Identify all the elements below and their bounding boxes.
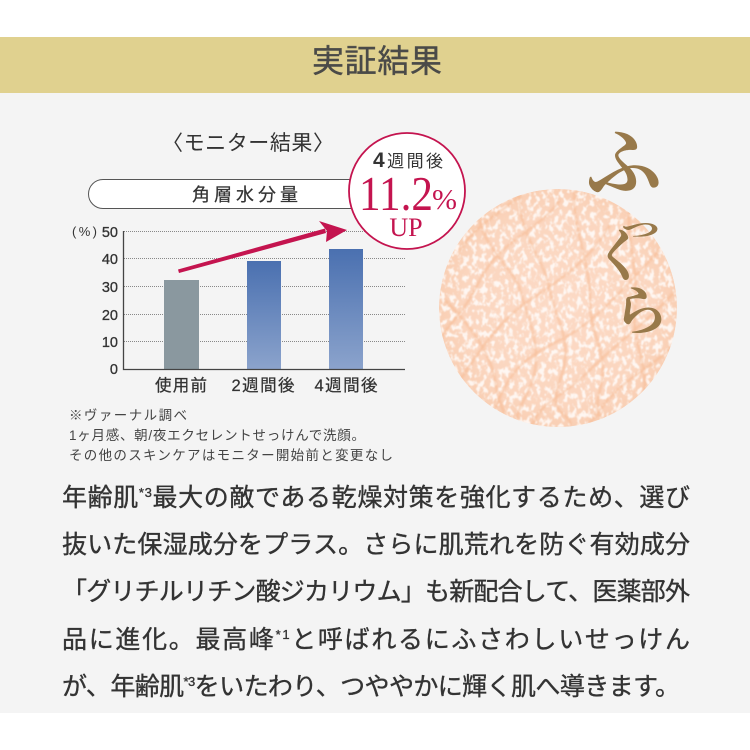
- footnote: [69, 407, 393, 463]
- x axis labels: [155, 376, 378, 395]
- calligraphy: fukkura: っ: [615, 211, 666, 244]
- body text: 年齢肌: [62, 484, 138, 512]
- body text: 「グリチルリチン酸ジカリウム」も新配合して、医薬部外: [62, 578, 690, 606]
- footnote: 1ヶ月感、朝/夜エクセレントせっけんで洗顔。: [69, 427, 365, 443]
- unit label: (%): [72, 224, 97, 239]
- bar: 4 weeks: [329, 249, 363, 369]
- arrow: upward trend: [178, 221, 347, 273]
- metric label pill: [88, 180, 368, 208]
- y axis labels: 50: [102, 225, 118, 241]
- body text: 最大の敵である乾燥対策を強化するため、選び: [152, 484, 690, 512]
- heading: 実証結果: [312, 43, 442, 79]
- y axis labels: 30: [102, 280, 118, 296]
- body text: をいたわり、つややかに輝く肌へ導きます。: [195, 673, 680, 701]
- body text: [62, 484, 690, 701]
- panel: monitor results: [69, 132, 405, 463]
- body text: と呼ばれるにふさわしいせっけん: [291, 626, 690, 654]
- metric label pill: 角層水分量: [192, 185, 298, 205]
- bar chart: [72, 224, 405, 395]
- chart title: 〈モニター結果〉: [162, 132, 334, 155]
- body text: が、年齢肌: [62, 673, 184, 701]
- footnote: ※ヴァーナル調べ: [69, 407, 187, 423]
- badge: value: 11.2: [359, 166, 433, 221]
- y axis labels: 10: [102, 335, 118, 351]
- y axis labels: [102, 225, 118, 378]
- calligraphy: fukkura: く: [596, 228, 644, 289]
- x axis labels: 使用前: [155, 376, 207, 395]
- body text: *3: [184, 674, 195, 689]
- body text: 品に進化。最高峰: [62, 626, 274, 654]
- bar: 2 weeks: [247, 261, 281, 369]
- body text: *1: [276, 627, 290, 642]
- x axis labels: 4週間後: [314, 376, 378, 395]
- body text: 抜いた保湿成分をプラス。さらに肌荒れを防ぐ有効成分: [62, 531, 690, 559]
- y axis labels: 0: [110, 362, 118, 378]
- x axis labels: 2週間後: [232, 376, 295, 395]
- calligraphy: fukkura: ふ: [586, 123, 662, 207]
- bar: before use: [164, 280, 199, 369]
- header band: [0, 37, 750, 93]
- skin texture circle: [439, 189, 680, 430]
- badge: 4 weeks later: 4週間後: [373, 149, 443, 172]
- badge: 11.2% up: [349, 133, 465, 249]
- calligraphy: fukkura: [586, 123, 668, 342]
- badge: 11.2% up: %: [432, 185, 457, 216]
- y axis labels: 20: [102, 308, 118, 324]
- y axis labels: 40: [102, 252, 118, 268]
- badge: up: UP: [389, 213, 423, 242]
- body text: *3: [139, 485, 152, 500]
- calligraphy: fukkura: ら: [614, 282, 668, 342]
- footnote: その他のスキンケアはモニター開始前と変更なし: [69, 447, 393, 463]
